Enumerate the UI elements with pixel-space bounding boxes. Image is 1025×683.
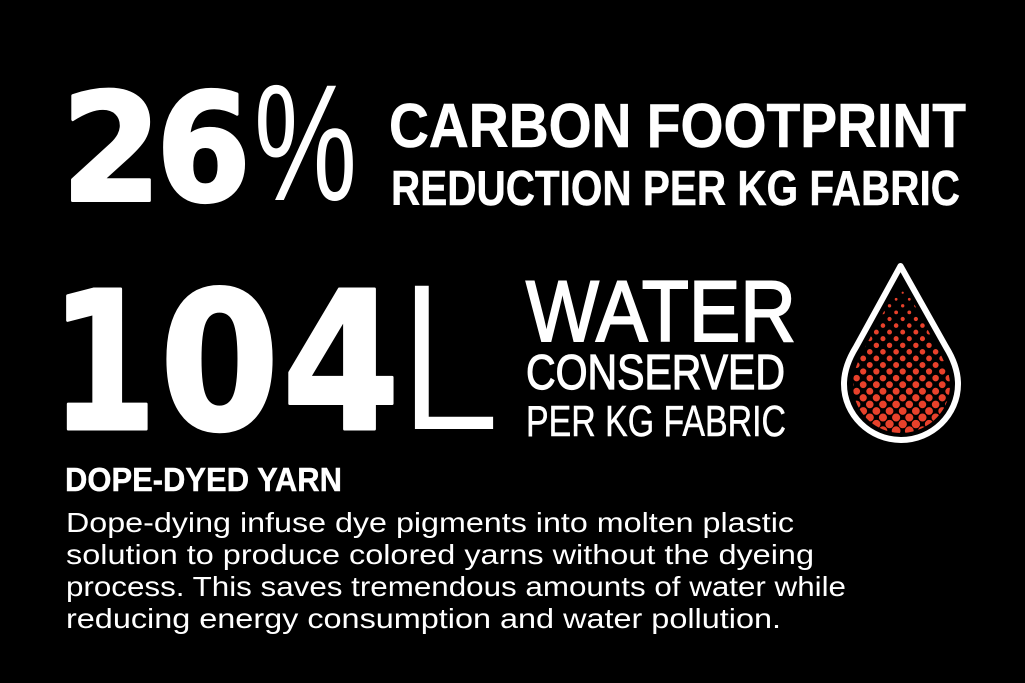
number: 104 [50,252,400,475]
number: 104: 1 [50,252,157,475]
heading: water conserved [526,264,796,446]
subheading: dope-dyed yarn: DOPE-DYED YARN [65,461,342,498]
number: 26: 2 [61,62,162,236]
body paragraph: process. This saves tremendous amounts of water while [66,571,846,602]
heading line: carbon footprint: CARBON FOOTPRINT [389,92,966,161]
heading line: water: WATER [526,264,796,360]
body paragraph [66,507,846,634]
halftone dots [853,292,950,433]
number: 26 [61,62,251,236]
body paragraph: Dope-dying infuse dye pigments into molten plastic [66,507,794,538]
body paragraph: reducing energy consumption and water pollution. [66,603,781,634]
heading line: conserved: CONSERVED [526,346,785,400]
icon: water drop with halftone [843,266,960,440]
number: 104: 0 [160,252,280,475]
drop outline [844,266,958,440]
percent sign: % [254,51,357,236]
stat: 26 percent [61,51,357,236]
body paragraph: solution to produce colored yarns without the dyeing [66,539,814,570]
heading line: per kg fabric: PER KG FABRIC [526,397,786,446]
heading: carbon footprint [389,92,966,216]
number: 104: 4 [282,252,400,475]
unit: L: L [398,238,501,477]
number: 26: 6 [156,62,251,236]
stat: 104 litres [50,238,501,477]
